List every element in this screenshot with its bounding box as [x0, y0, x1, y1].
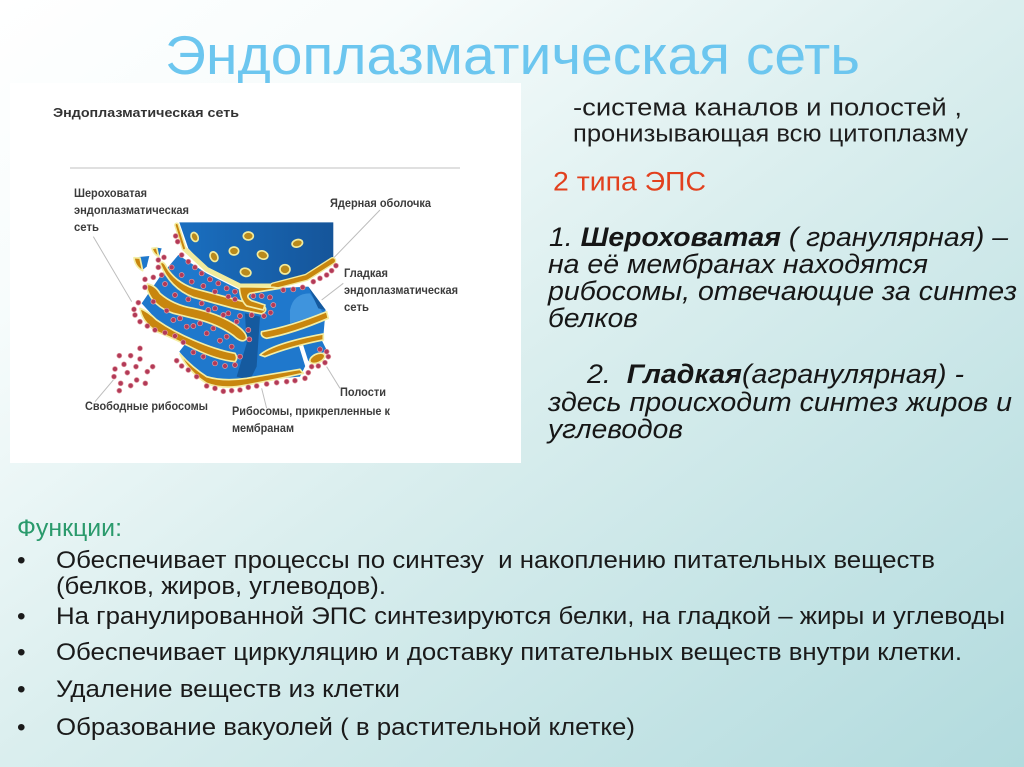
- attached ribosomes: [131, 233, 338, 394]
- functions heading: Функции:: [17, 515, 122, 542]
- functions list: •: [17, 547, 26, 574]
- text block: rough ER: 1. Шероховатая ( гранулярная) –: [549, 222, 1009, 252]
- functions list: [17, 547, 1005, 741]
- leader lines: [93, 210, 380, 408]
- diagram labels: Рибосомы, прикрепленные к: [232, 406, 390, 418]
- text block: rough ER: белков: [548, 303, 638, 333]
- diagram labels: сеть: [344, 302, 369, 314]
- diagram labels: Шероховатая: [74, 188, 147, 200]
- free ribosomes: [111, 346, 155, 393]
- functions list: Удаление веществ из клетки: [56, 676, 400, 703]
- illustration: membranes and ribosomes: [93, 210, 380, 408]
- nucleus: [179, 222, 333, 285]
- text block: rough ER: [547, 222, 1017, 333]
- diagram heading: Эндоплазматическая сеть: [53, 105, 239, 120]
- functions list: •: [17, 714, 26, 741]
- functions list: •: [17, 603, 26, 630]
- text block: smooth ER: 2. Гладкая(агранулярная) -: [586, 359, 964, 389]
- definition text: -система каналов и полостей ,: [573, 94, 962, 122]
- diagram labels: Полости: [340, 387, 386, 399]
- text block: rough ER: на её мембранах находятся: [548, 249, 928, 279]
- diagram labels: сеть: [74, 222, 99, 234]
- diagram labels: эндоплазматическая: [74, 205, 189, 217]
- functions list: •: [17, 639, 26, 666]
- title: Эндоплазматическая сеть: [165, 24, 860, 86]
- heading: two types: 2 типа ЭПС: [553, 166, 706, 196]
- text block: smooth ER: здесь происходит синтез жиров и: [547, 387, 1012, 417]
- diagram labels: мембранам: [232, 423, 294, 435]
- diagram labels: Гладкая: [344, 268, 388, 280]
- functions list: Обеспечивает процессы по синтезу и накоплению питательных веществ: [56, 547, 935, 574]
- functions list: (белков, жиров, углеводов).: [56, 573, 386, 600]
- panel: diagram of the endoplasmic reticulum: [10, 83, 521, 463]
- definition text: пронизывающая всю цитоплазму: [573, 120, 968, 148]
- diagram labels: Свободные рибосомы: [85, 401, 208, 413]
- membranes: [134, 225, 333, 387]
- diagram labels: Ядерная оболочка: [330, 198, 432, 210]
- diagram labels: [74, 188, 458, 435]
- definition text: [573, 94, 968, 148]
- blue cisternae body: [142, 255, 327, 383]
- functions list: •: [17, 676, 26, 703]
- functions list: Обеспечивает циркуляцию и доставку питательных веществ внутри клетки.: [56, 639, 962, 666]
- text block: smooth ER: [546, 359, 1012, 444]
- functions list: На гранулированной ЭПС синтезируются белки, на гладкой – жиры и углеводы: [56, 603, 1005, 630]
- text block: smooth ER: углеводов: [546, 414, 683, 444]
- diagram labels: эндоплазматическая: [344, 285, 458, 297]
- functions list: Образование вакуолей ( в растительной клетке): [56, 714, 635, 741]
- text block: rough ER: рибосомы, отвечающие за синтез: [547, 276, 1017, 306]
